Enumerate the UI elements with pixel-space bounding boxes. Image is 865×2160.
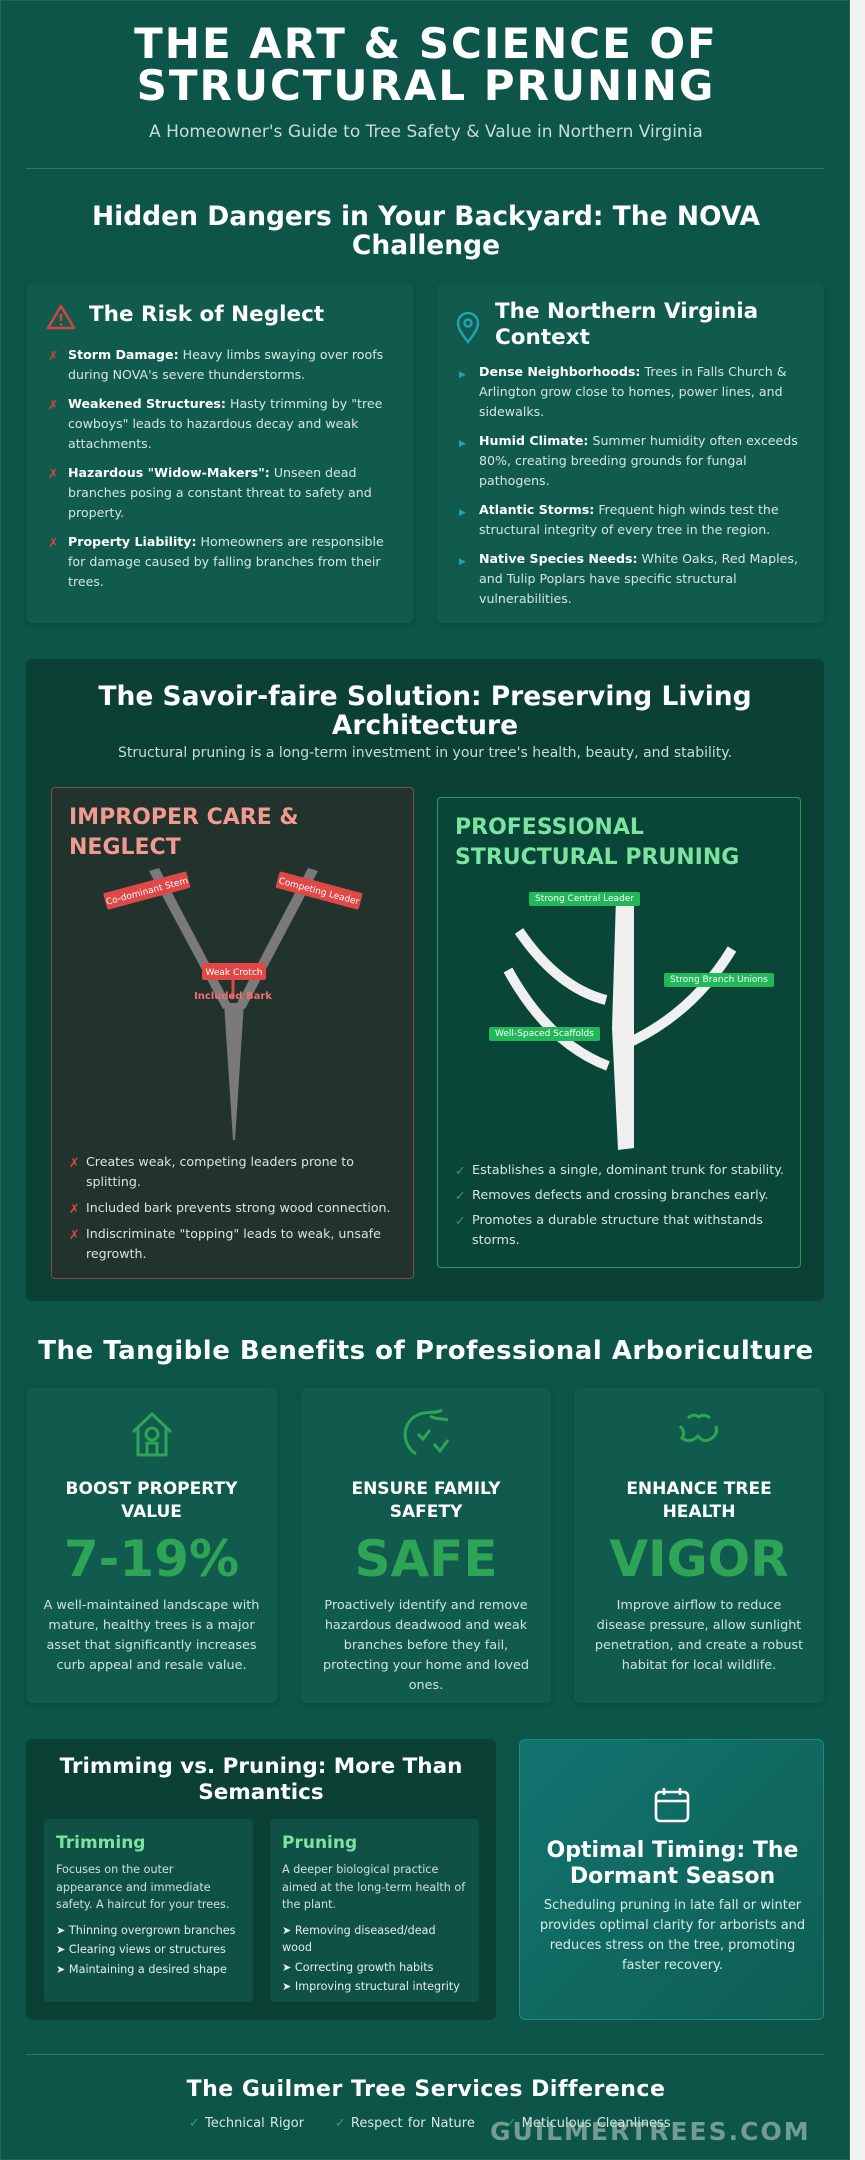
list [459, 364, 798, 606]
card: property value: VALUE [121, 1502, 182, 1522]
diagram: weak V tree: Competing Leader [277, 876, 360, 908]
list: Atlantic Storms: Frequent high winds test the structural integrity of every tree in the region. [479, 502, 779, 537]
label: strong branch unions [664, 973, 774, 987]
list: ✗ [48, 535, 59, 550]
heading: tangible benefits: The Tangible Benefits of Professional Arboriculture [38, 1336, 814, 1366]
list: ✓ [455, 1164, 466, 1179]
list: ✗ [69, 1201, 80, 1216]
list: Promotes a durable structure that withstands storms. [472, 1213, 763, 1248]
label: well-spaced scaffolds [489, 1027, 600, 1041]
list: ✗ [48, 348, 59, 363]
heading: PROFESSIONAL [455, 815, 644, 840]
list: Weakened Structures: Hasty trimming by "tree cowboys" leads to hazardous decay and weak attachments. [68, 396, 382, 451]
list: Property Liability: Homeowners are responsible for damage caused by falling branches from their trees. [68, 534, 384, 589]
panel: trimming vs pruning [26, 1739, 496, 2020]
heading [69, 805, 299, 860]
heading: IMPROPER CARE & [69, 805, 299, 830]
panel: professional pruning [437, 797, 801, 1268]
list: Removes defects and crossing branches early. [472, 1188, 768, 1203]
list: Native Species Needs: White Oaks, Red Maples, and Tulip Poplars have specific structural vulnerabilities. [479, 551, 798, 606]
card: tree health: HEALTH [663, 1502, 735, 1522]
list: Storm Damage: Heavy limbs swaying over roofs during NOVA's severe thunderstorms. [68, 347, 383, 382]
text: Scheduling pruning in late fall or winter provides optimal clarity for arborists and reduces stress on the tree, promoting faster recovery. [540, 1898, 805, 1973]
list: ✗ [48, 397, 59, 412]
icon: leaf check [404, 1408, 450, 1456]
heading: hidden dangers: Hidden Dangers in Your Backyard: The NOVA Challenge [92, 201, 760, 261]
diagram: weak V tree: Included Bark [194, 991, 272, 1002]
list: Dense Neighborhoods: Trees in Falls Church & Arlington grow close to homes, power lines, and sidewalks. [479, 364, 787, 419]
sub-panel: trimming: ➤ Maintaining a desired shape [56, 1962, 227, 1976]
card: tree health: Improve airflow to reduce disease pressure, allow sunlight penetration, and create a robust habitat for local wildlife. [595, 1598, 803, 1673]
list [48, 347, 384, 589]
sub-panel: pruning: ➤ Removing diseased/dead wood [282, 1924, 436, 1954]
card: tree health [574, 1388, 824, 1703]
list: ▶ [459, 508, 466, 518]
label: strong central leader [529, 892, 640, 906]
icon: warning [46, 304, 76, 330]
label: strong central leader: Strong Central Leader [535, 894, 634, 904]
title: THE ART & SCIENCE OF [134, 19, 718, 68]
list: ✗ [69, 1227, 80, 1242]
heading: The Savoir-faire Solution: Preserving Living Architecture [98, 681, 752, 741]
list: ✓ [455, 1214, 466, 1229]
diagram: strong tree [504, 906, 736, 1150]
heading: Optimal Timing: The [547, 1838, 798, 1863]
list: ✓ [455, 1189, 466, 1204]
heading: Trimming vs. Pruning: More Than Semantics [60, 1754, 462, 1805]
list: ✗ [48, 466, 59, 481]
subtitle: Structural pruning is a long-term investment in your tree's health, beauty, and stability. [118, 745, 732, 761]
card: property value: A well-maintained landscape with mature, healthy trees is a major asset that significantly increases curb appeal and resale value. [44, 1598, 259, 1673]
heading [495, 299, 758, 350]
list: Creates weak, competing leaders prone to splitting. [86, 1154, 354, 1189]
sub-panel: trimming: ➤ Clearing views or structures [56, 1943, 226, 1956]
title [134, 19, 718, 110]
diagram: weak V tree [104, 868, 362, 1140]
panel: risk of neglect [26, 283, 414, 623]
list: ✗ [69, 1155, 80, 1170]
footer checks: ✓ Technical Rigor ✓ Respect for Nature ✓ Meticulous Cleanliness [189, 2116, 671, 2131]
sub-panel: trimming: Focuses on the outer appearance and immediate safety. A haircut for your trees. [56, 1863, 229, 1911]
heading: STRUCTURAL PRUNING [455, 845, 739, 870]
heading: The Northern Virginia [495, 299, 758, 324]
sub-panel: trimming: Trimming [56, 1833, 145, 1853]
icon: house [132, 1412, 172, 1456]
sub-panel: trimming [44, 1819, 253, 2002]
panel: savoir-faire solution [26, 659, 824, 1301]
icon: calendar [654, 1788, 690, 1822]
list: ▶ [459, 439, 466, 449]
card: family safety: ENSURE FAMILY [351, 1479, 501, 1499]
list: Hazardous "Widow-Makers": Unseen dead branches posing a constant threat to safety and property. [68, 465, 372, 520]
panel: improper care [51, 787, 414, 1279]
list: Indiscriminate "topping" leads to weak, unsafe regrowth. [86, 1226, 381, 1261]
diagram: weak V tree: Weak Crotch [206, 968, 262, 978]
sub-panel: pruning: Pruning [282, 1833, 357, 1853]
list: ▶ [459, 370, 466, 380]
title: STRUCTURAL PRUNING [137, 61, 715, 110]
card: family safety: SAFE [354, 1530, 498, 1588]
list: Establishes a single, dominant trunk for stability. [472, 1163, 784, 1178]
heading: Context [495, 325, 590, 350]
heading [547, 1838, 798, 1889]
diagram: weak V tree: Co-dominant Stem [105, 876, 189, 908]
card: property value [26, 1388, 277, 1703]
subtitle: A Homeowner's Guide to Tree Safety & Value in Northern Virginia [149, 122, 703, 142]
label: strong branch unions: Strong Branch Unions [670, 975, 768, 985]
icon: vigor [679, 1414, 718, 1442]
heading: Dormant Season [570, 1864, 775, 1889]
list [69, 1154, 391, 1261]
card: family safety [301, 1388, 551, 1703]
list: Included bark prevents strong wood connection. [86, 1200, 391, 1215]
list: Humid Climate: Summer humidity often exceeds 80%, creating breeding grounds for fungal pathogens. [479, 433, 798, 488]
card: family safety: Proactively identify and remove hazardous deadwood and weak branches before they fail, protecting your home and loved ones. [323, 1598, 529, 1693]
icon: location pin [456, 312, 480, 344]
watermark: GUILMERTREES.COM [490, 2117, 811, 2146]
sub-panel: pruning: A deeper biological practice aimed at the long-term health of the plant. [282, 1863, 465, 1911]
card: property value: 7-19% [64, 1530, 239, 1588]
sub-panel: trimming: ➤ Thinning overgrown branches [56, 1924, 235, 1936]
panel: northern virginia context [437, 283, 824, 623]
card: tree health: ENHANCE TREE [626, 1479, 772, 1499]
footer heading: The Guilmer Tree Services Difference [187, 2077, 665, 2102]
sub-panel: pruning: ➤ Correcting growth habits [282, 1960, 433, 1974]
card: tree health: VIGOR [609, 1530, 789, 1588]
list: ▶ [459, 557, 466, 567]
card: family safety: SAFETY [390, 1502, 462, 1522]
label: well-spaced scaffolds: Well-Spaced Scaffolds [495, 1029, 594, 1039]
heading: NEGLECT [69, 835, 181, 860]
list [455, 1163, 784, 1248]
panel: optimal timing [519, 1739, 824, 2020]
heading [455, 815, 739, 870]
sub-panel: pruning [270, 1819, 479, 2002]
heading: The Risk of Neglect [89, 302, 324, 327]
sub-panel: pruning: ➤ Improving structural integrity [282, 1980, 460, 1993]
card: property value: BOOST PROPERTY [66, 1479, 237, 1499]
